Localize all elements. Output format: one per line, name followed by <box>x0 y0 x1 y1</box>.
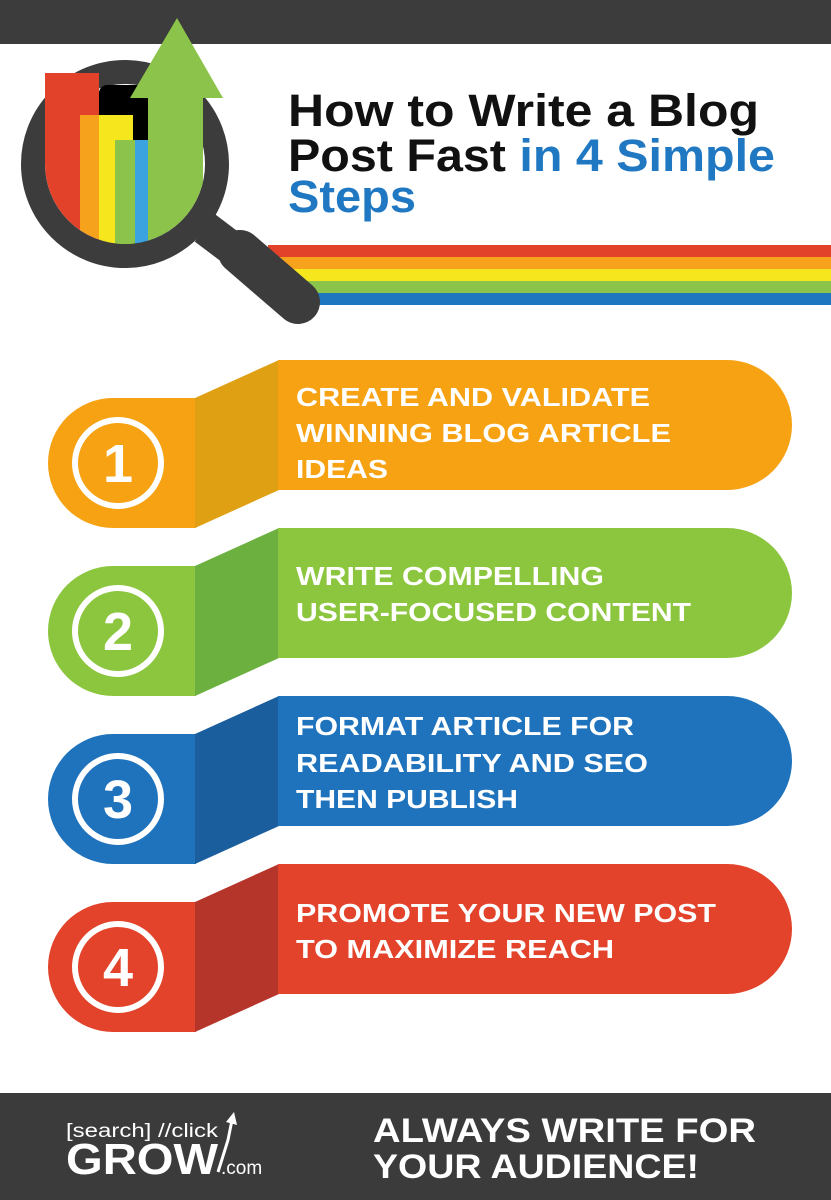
logo <box>66 1112 262 1184</box>
step 1: IDEAS <box>296 454 388 484</box>
footer <box>0 1093 831 1200</box>
step 3: THEN PUBLISH <box>296 784 518 814</box>
step 3 <box>48 696 792 864</box>
step 2: 2 <box>103 602 133 662</box>
step 1: CREATE AND VALIDATE <box>296 382 650 412</box>
logo: .com <box>221 1158 262 1179</box>
title: Steps <box>288 171 416 222</box>
step 3: READABILITY AND SEO <box>296 748 648 778</box>
step 2 <box>48 528 792 696</box>
title <box>288 85 775 222</box>
logo: [search] //click <box>66 1121 219 1142</box>
logo: GROW <box>66 1135 218 1184</box>
icon: magnifier with bar chart <box>33 18 298 340</box>
top bar <box>0 0 831 44</box>
footer: YOUR AUDIENCE! <box>373 1148 699 1186</box>
step 3: 3 <box>103 770 133 830</box>
title: Post Fast in 4 Simple <box>288 130 775 181</box>
title: How to Write a Blog <box>288 85 759 136</box>
step 3: FORMAT ARTICLE FOR <box>296 711 634 741</box>
step 2: WRITE COMPELLING <box>296 561 604 591</box>
step 2: USER-FOCUSED CONTENT <box>296 597 691 627</box>
step 1: 1 <box>103 434 133 494</box>
step 4 <box>48 864 792 1032</box>
step 4: TO MAXIMIZE REACH <box>296 934 614 964</box>
rainbow stripes <box>268 245 831 305</box>
step 4: 4 <box>103 938 133 998</box>
step 1 <box>48 360 792 528</box>
step 4: PROMOTE YOUR NEW POST <box>296 898 716 928</box>
slogan: ALWAYS WRITE FOR <box>373 1112 756 1150</box>
step 1: WINNING BLOG ARTICLE <box>296 418 671 448</box>
